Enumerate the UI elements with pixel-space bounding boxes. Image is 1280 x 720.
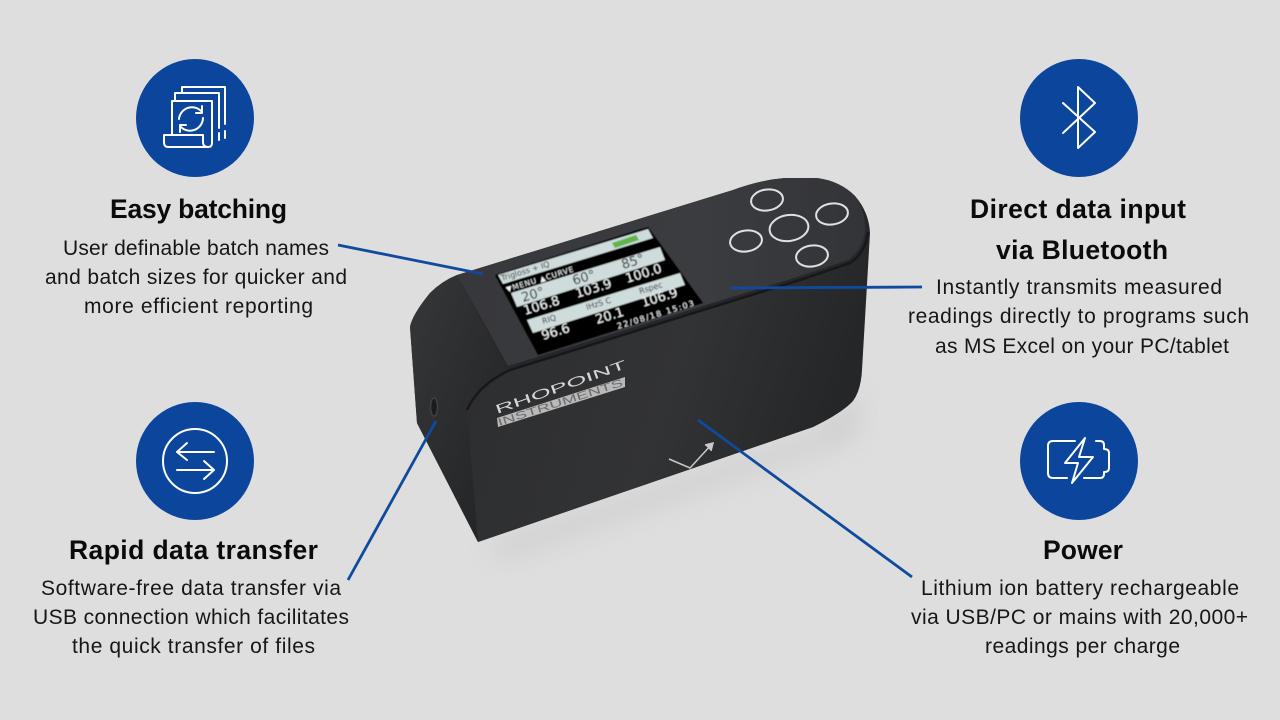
text block: the quick transfer of files — [72, 635, 315, 658]
device shadow — [490, 392, 862, 556]
device screen: 106.8 — [522, 294, 562, 319]
text block — [33, 577, 349, 658]
panel: bluetooth — [908, 59, 1249, 358]
text block: as MS Excel on your PC/tablet — [935, 335, 1229, 358]
text block: readings directly to programs such — [908, 305, 1249, 328]
device screen — [495, 227, 703, 355]
device screen: 103.9 — [574, 277, 614, 302]
panel: power — [911, 402, 1248, 658]
device screen: Rspec — [638, 280, 664, 296]
text block — [911, 577, 1248, 658]
heading: Direct data input — [970, 194, 1186, 224]
heading: Power — [1043, 535, 1123, 565]
text block: Software-free data transfer via — [41, 577, 341, 600]
device logo: INSTRUMENTS — [496, 377, 625, 429]
device USB port — [430, 398, 438, 416]
connector line: easy batching — [338, 245, 483, 274]
text block: readings per charge — [985, 635, 1180, 658]
text block: Instantly transmits measured — [936, 276, 1222, 299]
text block: via USB/PC or mains with 20,000+ — [911, 606, 1248, 629]
heading: Rapid data transfer — [69, 535, 318, 565]
battery indicator — [612, 235, 639, 248]
connector line: power — [698, 420, 912, 577]
device angle symbol — [669, 443, 713, 468]
device screen: ▼MENU ▲CURVE — [505, 265, 575, 294]
heading — [970, 194, 1186, 265]
device front face — [467, 232, 868, 542]
device screen: 20.1 — [594, 305, 626, 328]
icon: batch documents — [136, 59, 254, 177]
panel: rapid data transfer — [33, 402, 349, 658]
device control buttons — [729, 187, 849, 269]
icon: bluetooth — [1020, 59, 1138, 177]
text block: more efficient reporting — [84, 295, 313, 318]
icon: transfer arrows — [136, 402, 254, 520]
device screen: 20° — [520, 285, 546, 306]
device top face — [457, 178, 865, 366]
device screen: 60° — [571, 268, 597, 289]
text block: USB connection which facilitates — [33, 606, 349, 629]
device end cap — [410, 275, 508, 542]
device screen: IHzS C — [585, 296, 613, 312]
device: gloss meter — [410, 178, 870, 556]
device screen: 22/08/18 15:03 — [616, 299, 695, 331]
heading: Easy batching — [110, 194, 287, 224]
panel: easy batching — [45, 59, 347, 318]
text block: and batch sizes for quicker and — [45, 266, 347, 289]
text block: User definable batch names — [63, 237, 329, 260]
device screen: 96.6 — [540, 321, 572, 344]
heading: via Bluetooth — [996, 235, 1168, 265]
device screen: RIQ — [541, 313, 557, 326]
device screen: Trigloss + IQ — [499, 260, 551, 283]
device logo — [493, 357, 629, 429]
device screen: 85° — [620, 252, 646, 273]
device screen: 100.0 — [624, 262, 664, 287]
device logo: RHOPOINT — [493, 357, 629, 417]
text block — [45, 237, 347, 318]
connector line: bluetooth — [730, 287, 922, 288]
icon: charging battery — [1020, 402, 1138, 520]
text block: Lithium ion battery rechargeable — [921, 577, 1239, 600]
text block — [908, 276, 1249, 358]
connector line: data transfer — [348, 421, 436, 580]
device screen: 106.9 — [640, 286, 680, 311]
device body — [410, 178, 870, 542]
